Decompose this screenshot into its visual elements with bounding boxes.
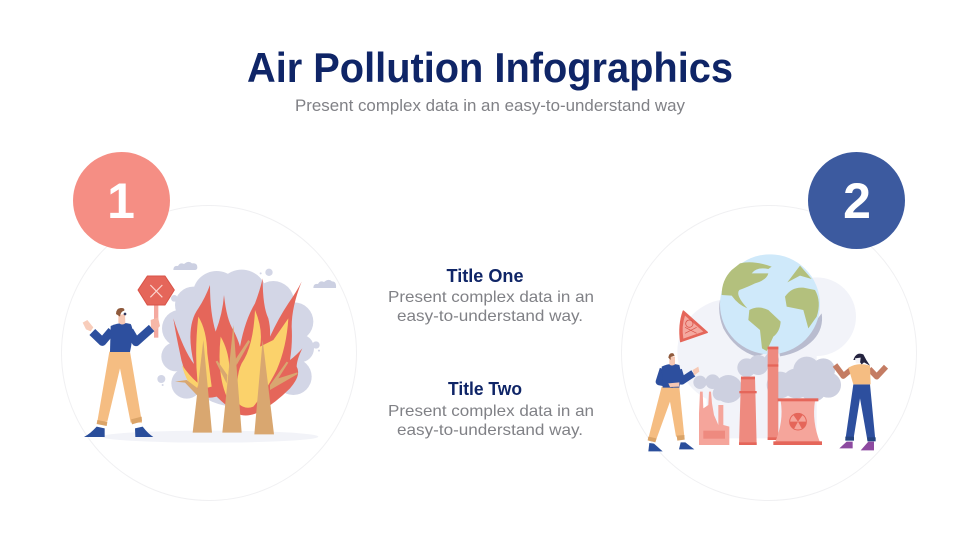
icon: man pointing bbox=[648, 353, 699, 451]
text block: title two: Present complex data in an bbox=[388, 403, 594, 420]
icon: stop sign bbox=[138, 276, 174, 338]
icon: burnt trees bbox=[175, 325, 298, 434]
illustration: wildfire and man with stop sign bbox=[83, 262, 336, 443]
icon: smoke cloud bbox=[157, 269, 320, 407]
icon: man bbox=[83, 308, 160, 437]
badge: number 1 bbox=[73, 152, 170, 249]
panel: right ring bbox=[622, 206, 916, 500]
badge: number 2: 2 bbox=[843, 173, 871, 229]
icon: smoke arcs around globe bbox=[719, 300, 822, 357]
icon: small clouds bbox=[173, 262, 336, 288]
badge: number 2 bbox=[808, 152, 905, 249]
background blobs bbox=[677, 277, 856, 438]
icon: tall chimneys bbox=[739, 347, 778, 445]
badge: number 1: 1 bbox=[107, 173, 135, 229]
text block: title two bbox=[388, 379, 594, 439]
icon: globe bbox=[720, 254, 820, 354]
text block: title one: easy-to-understand way. bbox=[397, 308, 583, 325]
icon: warning triangle bbox=[680, 311, 707, 342]
panel: left ring bbox=[62, 206, 356, 500]
text block: title two: easy-to-understand way. bbox=[397, 422, 583, 439]
subtitle: Present complex data in an easy-to-understand way bbox=[295, 97, 686, 115]
icon: small factory bbox=[699, 392, 729, 445]
icon: flame core bbox=[182, 310, 288, 408]
icon: nuclear cooling tower bbox=[773, 398, 822, 445]
icon: woman with mask bbox=[835, 354, 886, 450]
illustration: polluted globe, factories and two people bbox=[648, 254, 886, 451]
text block: title one: Title One bbox=[446, 266, 524, 286]
text block: title one: Present complex data in an bbox=[388, 289, 594, 306]
ground shadow bbox=[102, 431, 318, 443]
text block: title two: Title Two bbox=[448, 379, 522, 399]
icon: smoke clouds bbox=[693, 353, 841, 403]
title: Air Pollution Infographics bbox=[247, 44, 733, 91]
icon: flames bbox=[173, 278, 302, 415]
text block: title one bbox=[388, 266, 594, 325]
